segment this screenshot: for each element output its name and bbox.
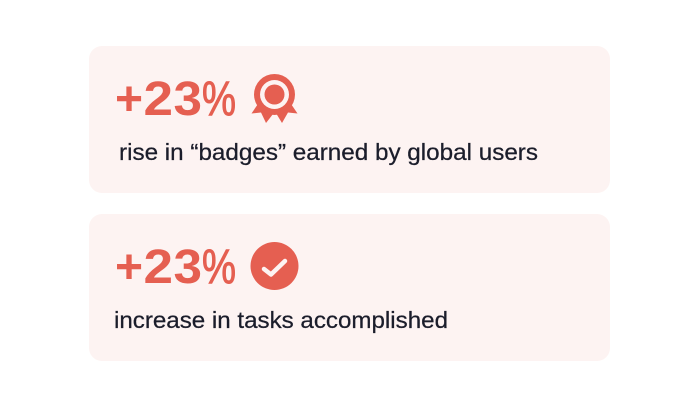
stat: +23% tasks: 2 [144,241,173,294]
panel: tasks stat [89,214,610,361]
stat: +23% tasks: + [115,241,143,294]
icon: check circle [250,242,298,290]
panel: badges stat [89,46,610,193]
stat: +23% badges: + [115,73,143,126]
icon: ribbon badge [252,74,298,123]
stat: +23% badges: 3 [174,73,202,126]
stat: +23% tasks: 3 [174,241,202,294]
stat: +23% badges: 2 [144,73,173,126]
description: badges: rise in “badges” earned by global users [119,139,538,165]
description: tasks: increase in tasks accomplished [114,307,448,333]
stat: +23% tasks [115,241,236,294]
stat: +23% tasks: % [202,241,236,294]
stat: +23% badges [115,73,236,126]
stat: +23% badges: % [202,73,236,126]
